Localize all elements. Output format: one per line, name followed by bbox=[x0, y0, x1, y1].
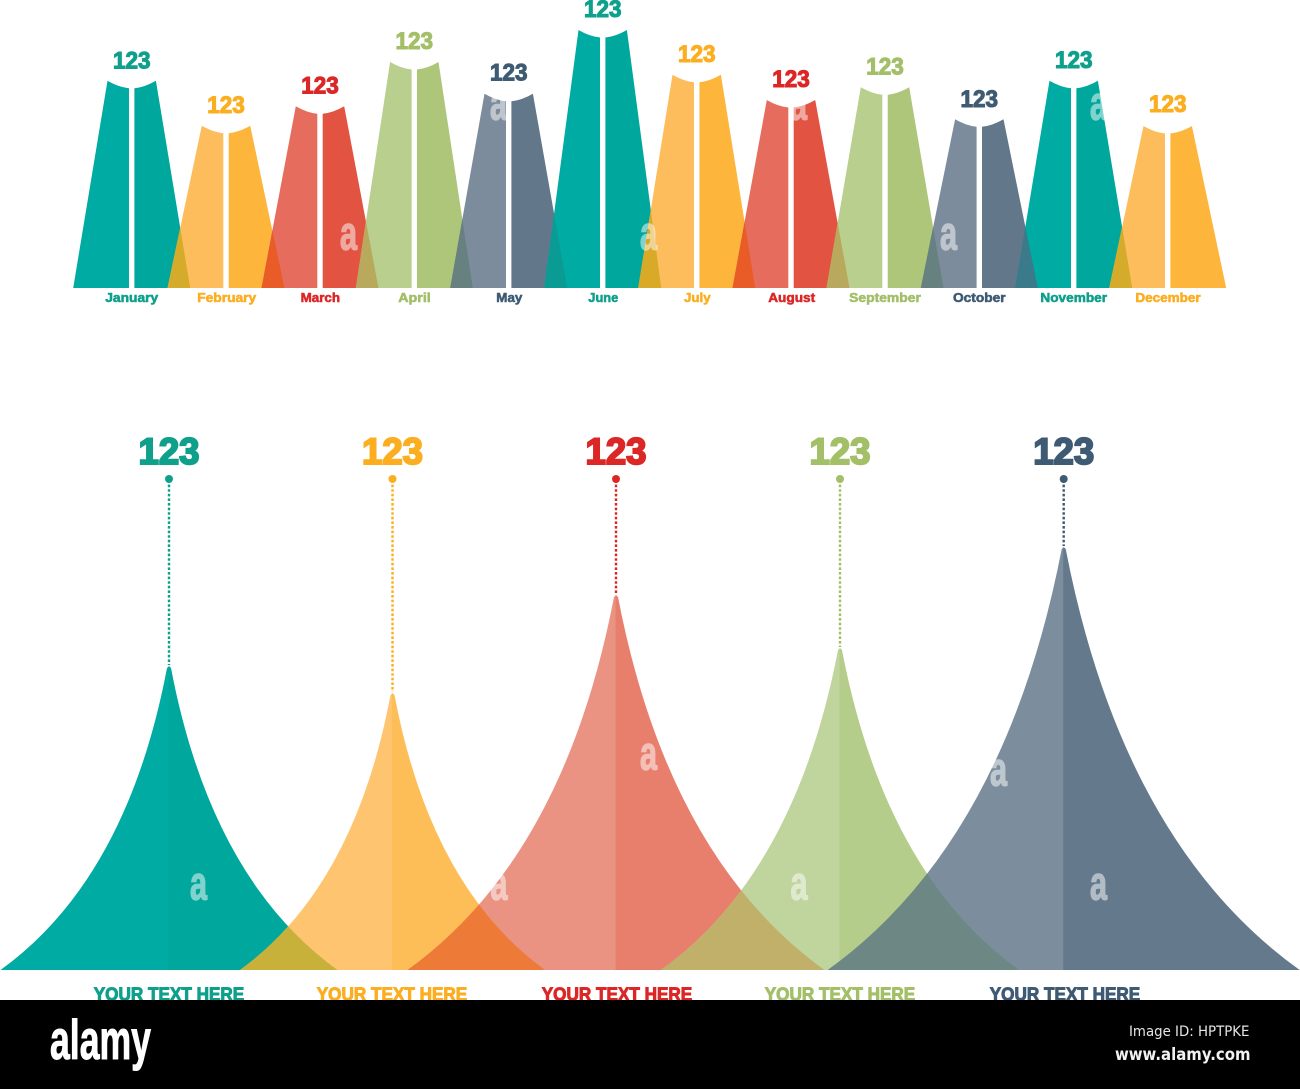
watermark letters: a bbox=[190, 856, 208, 910]
bar: May: May bbox=[496, 291, 522, 305]
peak: red: 123 bbox=[586, 430, 646, 472]
bar: March bbox=[262, 72, 378, 305]
watermark letters: a bbox=[790, 856, 808, 910]
bar: June bbox=[544, 0, 661, 305]
bar: September bbox=[826, 54, 944, 305]
peak: green bbox=[661, 430, 1019, 970]
bar: November bbox=[1015, 47, 1132, 305]
watermark letters: a bbox=[1090, 76, 1108, 130]
bar: August: August bbox=[768, 291, 816, 305]
peak: orange bbox=[240, 430, 545, 970]
watermark letters: a bbox=[340, 206, 358, 260]
watermark letters: a bbox=[640, 206, 658, 260]
peak: slate: 123 bbox=[1033, 430, 1094, 472]
caption: red: YOUR TEXT HERE bbox=[542, 984, 692, 1004]
image id: Image ID: HPTPKE bbox=[1129, 1024, 1250, 1040]
bar: April: April bbox=[398, 291, 431, 305]
bar: February: February bbox=[197, 291, 256, 305]
footer band bbox=[0, 1000, 1300, 1089]
watermark letters: a bbox=[990, 742, 1008, 796]
peak chart bbox=[0, 430, 1300, 1004]
bar: August bbox=[732, 66, 850, 305]
peak: teal bbox=[0, 430, 338, 970]
footer logo: alamy bbox=[50, 1008, 151, 1071]
bar: September: 123 bbox=[866, 54, 904, 80]
bar: January bbox=[73, 48, 190, 305]
watermark letters: a bbox=[790, 76, 808, 130]
watermark letters: a bbox=[1090, 856, 1108, 910]
caption: slate: YOUR TEXT HERE bbox=[990, 984, 1140, 1004]
bar: January: January bbox=[105, 291, 158, 305]
bar: December bbox=[1109, 91, 1226, 305]
watermark letters: a bbox=[640, 726, 658, 780]
watermark letters: a bbox=[940, 206, 958, 260]
watermark letters bbox=[190, 76, 1108, 910]
caption: teal: YOUR TEXT HERE bbox=[94, 984, 244, 1004]
bar: October: 123 bbox=[961, 86, 998, 113]
bar: October: October bbox=[953, 291, 1006, 305]
watermark letters: a bbox=[490, 856, 508, 910]
peak: red bbox=[408, 430, 824, 970]
peak: teal: 123 bbox=[138, 430, 200, 472]
caption: green: YOUR TEXT HERE bbox=[765, 984, 915, 1004]
bar: June: June bbox=[588, 291, 618, 305]
bar: April bbox=[356, 28, 473, 305]
bar: February: 123 bbox=[207, 92, 245, 119]
peak overlaps bbox=[240, 874, 1019, 970]
bar: March: 123 bbox=[301, 72, 339, 100]
bar: October bbox=[921, 86, 1038, 305]
peak: slate bbox=[828, 430, 1300, 970]
bar: March: March bbox=[301, 291, 340, 305]
bar: January: 123 bbox=[113, 48, 150, 74]
bar: July: July bbox=[684, 291, 711, 305]
bar: September: September bbox=[849, 291, 921, 305]
bar: December: December bbox=[1135, 291, 1201, 305]
bar: July bbox=[638, 41, 755, 305]
bar: May bbox=[450, 60, 567, 305]
bar: December: 123 bbox=[1149, 91, 1186, 118]
monthly bar chart bbox=[73, 0, 1226, 305]
website: www.alamy.com bbox=[1115, 1045, 1250, 1065]
bar: November: 123 bbox=[1055, 47, 1092, 74]
watermark letters: a bbox=[490, 76, 508, 130]
bar: May: 123 bbox=[490, 60, 527, 86]
peak: orange: 123 bbox=[362, 430, 423, 472]
peak: green: 123 bbox=[810, 430, 870, 472]
bar: August: 123 bbox=[772, 66, 810, 93]
bar: July: 123 bbox=[678, 41, 715, 68]
bar: April: 123 bbox=[396, 28, 433, 55]
bar: November: November bbox=[1040, 291, 1107, 305]
bar overlaps bbox=[168, 210, 1132, 288]
caption: orange: YOUR TEXT HERE bbox=[317, 984, 467, 1004]
bar: February bbox=[168, 92, 284, 305]
